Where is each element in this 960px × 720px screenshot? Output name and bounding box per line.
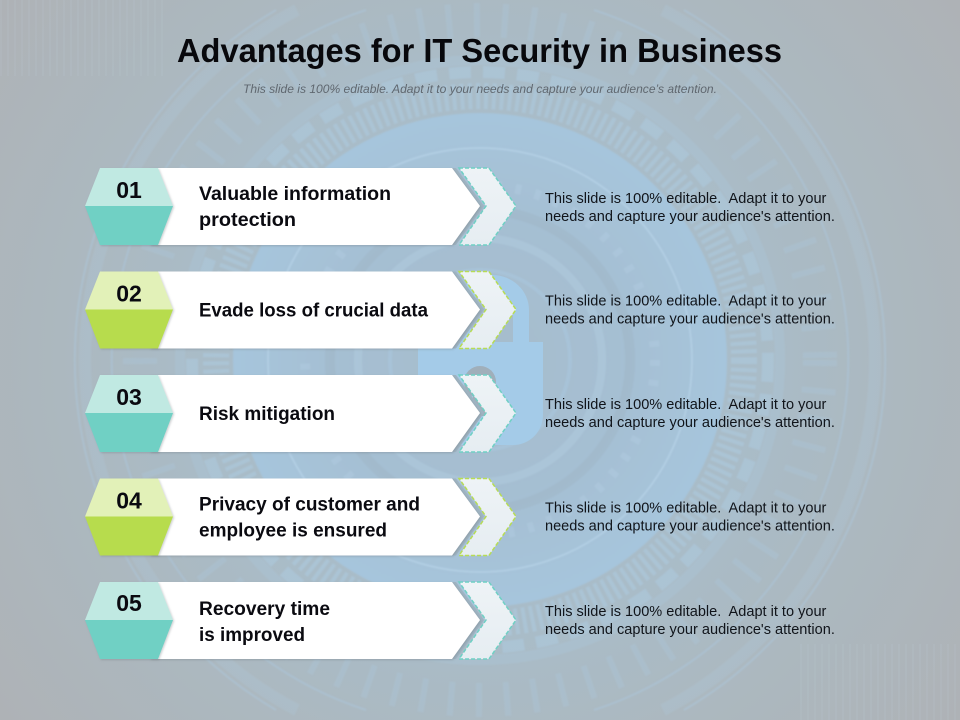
row 04 xyxy=(85,478,835,556)
description: This slide is 100% editable. Adapt it to your xyxy=(545,500,827,516)
description: This slide is 100% editable. Adapt it to your xyxy=(545,604,827,620)
row 01 xyxy=(85,168,835,245)
arrow banner xyxy=(150,478,484,556)
arrow banner xyxy=(150,168,484,245)
number: 03 xyxy=(116,384,142,410)
chevron xyxy=(459,582,516,659)
description: This slide is 100% editable. Adapt it to your xyxy=(545,191,827,207)
description: needs and capture your audience's attention. xyxy=(545,415,835,431)
number hexagon xyxy=(85,168,173,245)
row 02 xyxy=(85,272,835,348)
subtitle: This slide is 100% editable. Adapt it to your needs and capture your audience’s attention. xyxy=(243,82,717,96)
chevron xyxy=(459,478,516,556)
description: needs and capture your audience's attention. xyxy=(545,312,835,328)
chevron xyxy=(459,168,516,245)
number hexagon xyxy=(85,272,173,348)
number hexagon xyxy=(85,375,173,452)
label: protection xyxy=(199,210,296,231)
label: Recovery time xyxy=(199,599,330,620)
label: employee is ensured xyxy=(199,520,387,542)
number: 05 xyxy=(116,590,142,616)
description: needs and capture your audience's attention. xyxy=(545,518,835,534)
arrow banner xyxy=(150,272,484,348)
title: Advantages for IT Security in Business xyxy=(177,32,782,69)
chevron xyxy=(459,272,516,348)
label: Valuable information xyxy=(199,184,391,205)
label: Privacy of customer and xyxy=(199,494,420,516)
arrow banner xyxy=(150,375,484,452)
number: 01 xyxy=(116,177,142,203)
row 05 xyxy=(85,582,835,659)
number hexagon xyxy=(85,478,173,556)
number: 04 xyxy=(116,488,142,514)
description: This slide is 100% editable. Adapt it to your xyxy=(545,397,827,413)
chevron xyxy=(459,375,516,452)
description: needs and capture your audience's attention. xyxy=(545,209,835,225)
row 03 xyxy=(85,375,835,452)
label: Evade loss of crucial data xyxy=(199,300,428,322)
icon: padlock xyxy=(418,275,543,445)
label: Risk mitigation xyxy=(199,404,335,425)
number: 02 xyxy=(116,280,142,306)
description: This slide is 100% editable. Adapt it to your xyxy=(545,294,827,310)
description: needs and capture your audience's attention. xyxy=(545,622,835,638)
label: is improved xyxy=(199,625,305,646)
arrow banner xyxy=(150,582,484,659)
number hexagon xyxy=(85,582,173,659)
